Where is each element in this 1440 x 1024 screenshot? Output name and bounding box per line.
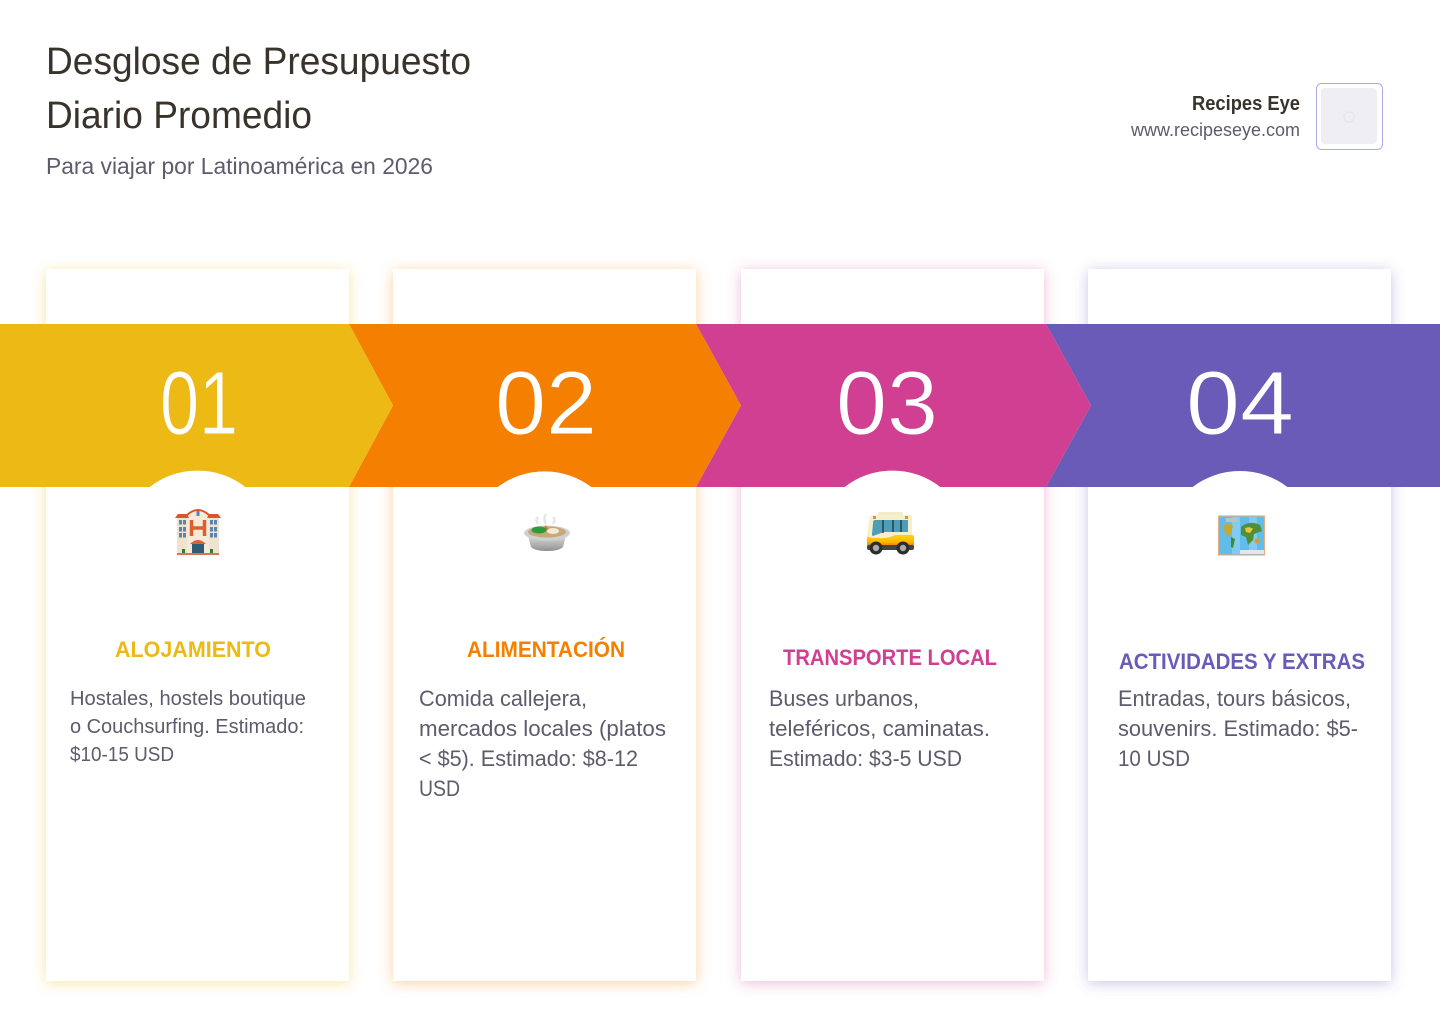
description: alimentacion: USD — [419, 776, 460, 801]
description: transporte: Estimado: $3-5 USD — [769, 746, 962, 771]
description: actividades: 10 USD — [1118, 746, 1190, 771]
heading: alojamiento: ALOJAMIENTO — [115, 637, 271, 662]
description: alimentacion — [419, 686, 666, 801]
brand name: Recipes Eye — [1192, 93, 1300, 115]
panel: alojamiento — [70, 510, 306, 766]
title: Diario Promedio — [46, 95, 312, 137]
description: alimentacion: mercados locales (platos — [419, 716, 666, 741]
panel: actividades — [1118, 516, 1365, 771]
icon: hotel — [175, 510, 221, 555]
description: alojamiento: Hostales, hostels boutique — [70, 688, 306, 710]
step number 01: 01 — [160, 354, 238, 454]
heading: actividades: ACTIVIDADES Y EXTRAS — [1119, 649, 1365, 674]
icon: map — [1218, 516, 1264, 555]
step number 03: 03 — [836, 354, 938, 454]
description: transporte: teleféricos, caminatas. — [769, 716, 990, 741]
description: actividades — [1118, 686, 1358, 771]
description: transporte: Buses urbanos, — [769, 686, 919, 711]
description: alojamiento — [70, 688, 306, 766]
subtitle: Para viajar por Latinoamérica en 2026 — [46, 153, 433, 179]
heading: alimentacion: ALIMENTACIÓN — [467, 637, 625, 662]
heading: transporte: TRANSPORTE LOCAL — [783, 645, 997, 670]
description: transporte — [769, 686, 990, 771]
panel: alimentacion — [419, 514, 666, 801]
icon notches — [149, 471, 1288, 488]
title: Desglose de Presupuesto — [46, 41, 471, 83]
icon: bowl of food — [524, 514, 570, 551]
description: actividades: Entradas, tours básicos, — [1118, 686, 1351, 711]
arrow band — [0, 324, 1440, 487]
icon: brand logo — [1316, 84, 1382, 150]
description: alimentacion: Comida callejera, — [419, 686, 587, 711]
brand url: www.recipeseye.com — [1130, 120, 1300, 140]
step number 04: 04 — [1186, 354, 1294, 454]
description: actividades: souvenirs. Estimado: $5- — [1118, 716, 1358, 741]
description: alojamiento: o Couchsurfing. Estimado: — [70, 716, 304, 738]
description: alojamiento: $10-15 USD — [70, 744, 174, 766]
description: alimentacion: < $5). Estimado: $8-12 — [419, 746, 638, 771]
title — [46, 41, 471, 137]
panel: transporte — [769, 512, 997, 771]
panel: card backgrounds — [46, 269, 1391, 981]
step number 02: 02 — [495, 354, 597, 454]
icon: bus — [867, 512, 914, 554]
